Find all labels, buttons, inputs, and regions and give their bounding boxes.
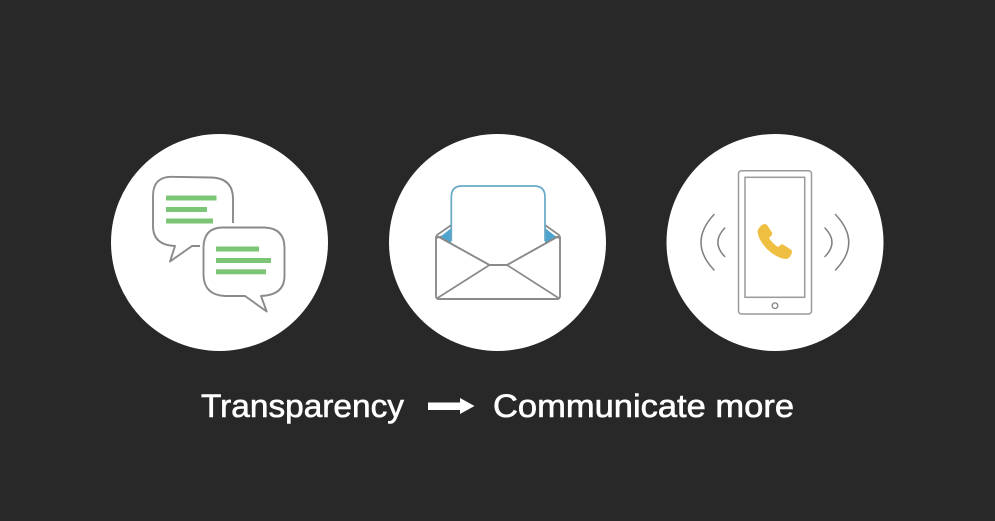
- icon: first speech bubble: [153, 177, 233, 262]
- caption: Transparency: Transparency: [201, 388, 404, 424]
- panel: phone circle: [666, 134, 884, 351]
- icon: yellow handset: [758, 224, 792, 259]
- icon: left vibration waves: [701, 214, 725, 270]
- panel: chat bubbles circle: [111, 134, 328, 351]
- arrow: [428, 398, 474, 414]
- icon: smartphone: [738, 171, 812, 314]
- icon: open envelope with letter: [436, 186, 560, 299]
- icon: second speech bubble: [204, 228, 284, 312]
- icon: right vibration waves: [825, 214, 849, 270]
- caption: Communicate more: Communicate more: [493, 388, 794, 424]
- panel: envelope circle: [389, 134, 606, 351]
